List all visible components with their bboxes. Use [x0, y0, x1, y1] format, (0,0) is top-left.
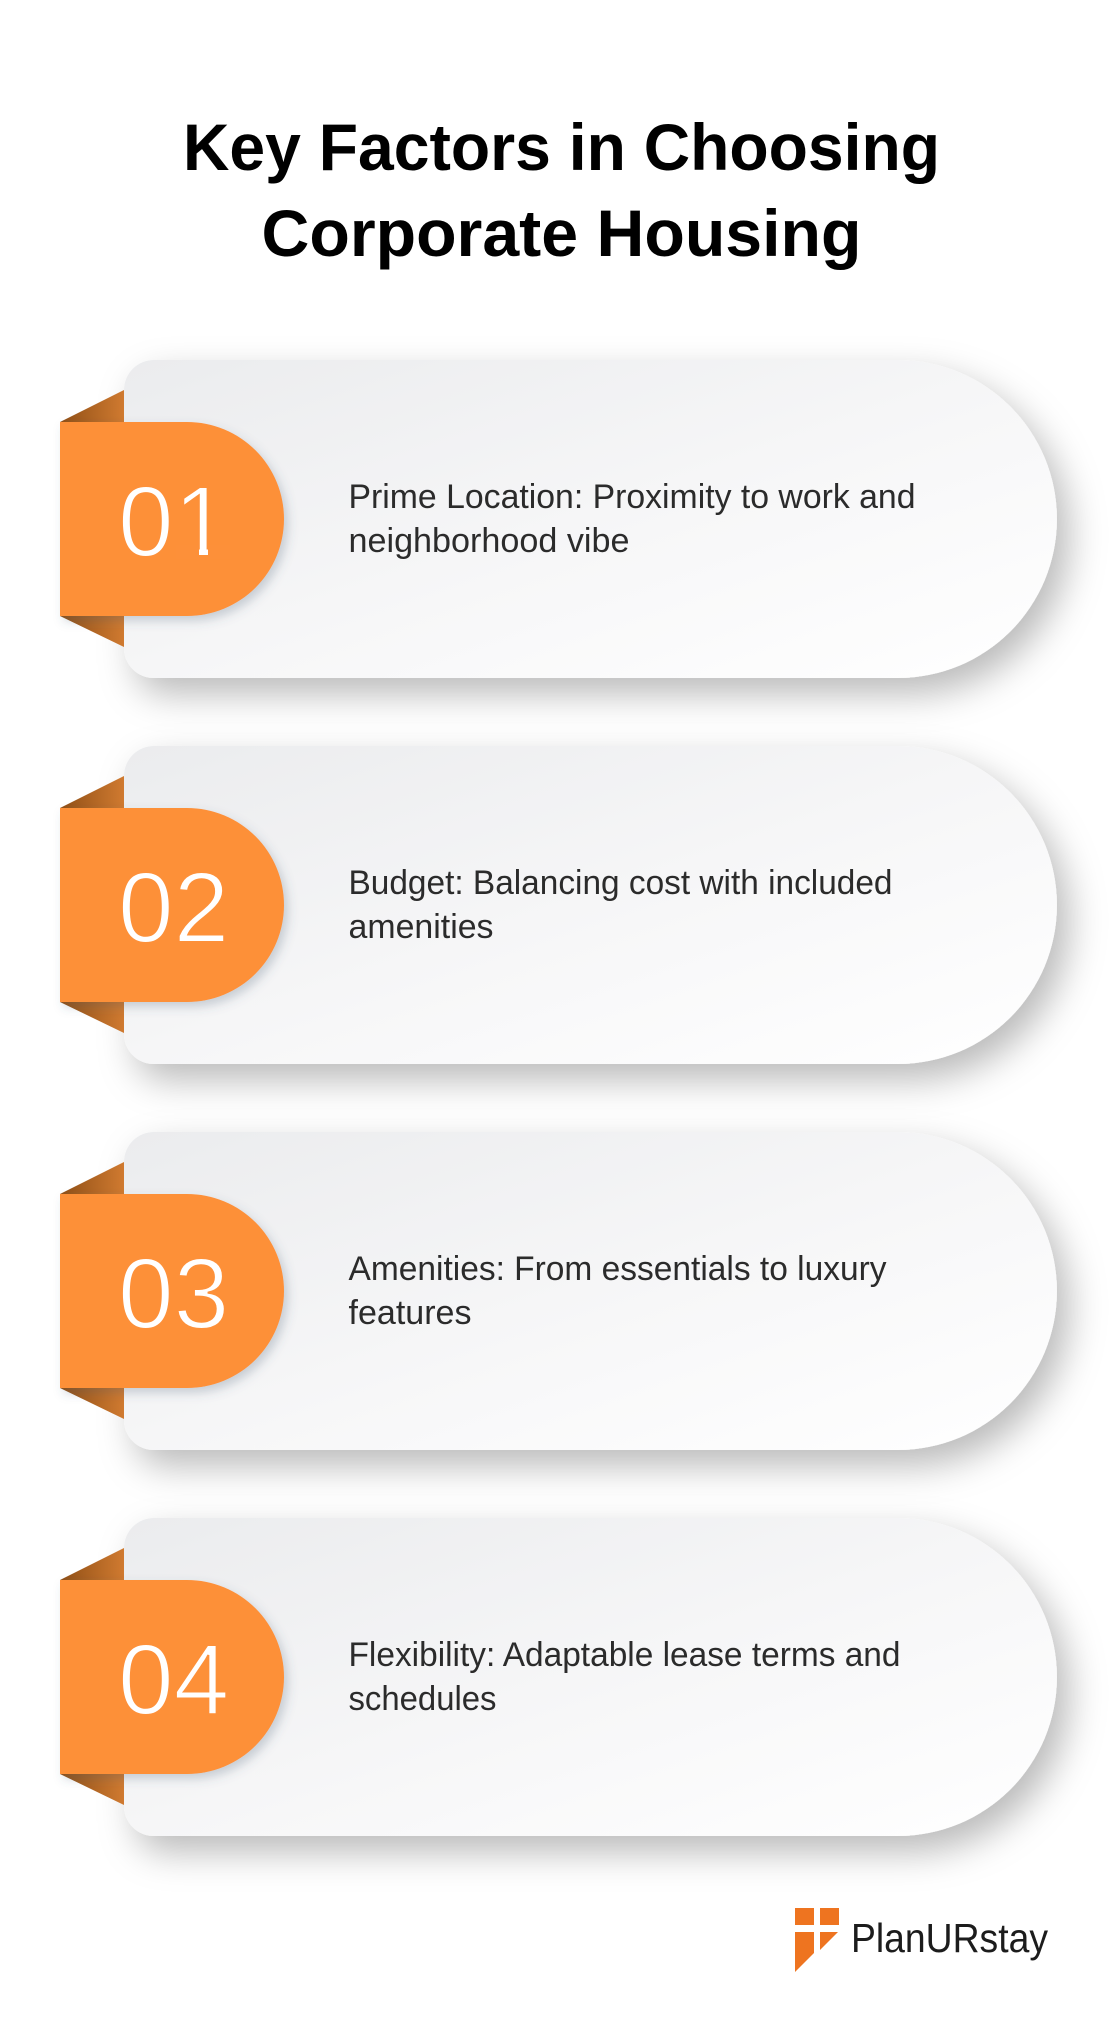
- ribbon fold top 02: [60, 776, 124, 808]
- number tab 01: [60, 422, 284, 616]
- text 03: Amenities: From essentials to luxury: [348, 1250, 886, 1288]
- number 02: 02: [118, 852, 229, 964]
- logo: PlanURstay: [795, 1908, 1048, 1972]
- card 03 background: [124, 1132, 1057, 1450]
- ribbon fold top 03: [60, 1162, 124, 1194]
- ribbon fold bottom 04: [60, 1774, 124, 1805]
- text 04: schedules: [348, 1680, 496, 1718]
- text 02: amenities: [348, 908, 494, 946]
- card 04 background: [124, 1518, 1057, 1836]
- number tab 02: [60, 808, 284, 1002]
- number 01: 01: [118, 466, 229, 578]
- text 02: Budget: Balancing cost with included: [348, 864, 892, 902]
- panel: factor 03: [60, 1132, 1057, 1450]
- text 04: Flexibility: Adaptable lease terms and: [348, 1636, 900, 1674]
- text 01: Prime Location: Proximity to work and: [348, 478, 916, 516]
- text 03: features: [348, 1294, 472, 1332]
- ribbon fold bottom 01: [60, 616, 124, 647]
- number tab 03: [60, 1194, 284, 1388]
- icon: logo mark: [795, 1908, 839, 1972]
- number 03: 03: [118, 1238, 229, 1350]
- number tab 04: [60, 1580, 284, 1774]
- ribbon fold bottom 02: [60, 1002, 124, 1033]
- title: [183, 110, 940, 270]
- title: Key Factors in Choosing: [183, 110, 940, 184]
- text 01: neighborhood vibe: [348, 522, 630, 560]
- ribbon fold top 01: [60, 390, 124, 422]
- ribbon fold bottom 03: [60, 1388, 124, 1419]
- card 01 background: [124, 360, 1057, 678]
- panel: factor 04: [60, 1518, 1057, 1836]
- panel: factor 01: [60, 360, 1057, 678]
- card 02 background: [124, 746, 1057, 1064]
- ribbon fold top 04: [60, 1548, 124, 1580]
- logo wordmark: PlanURstay: [851, 1915, 1048, 1961]
- panel: factor 02: [60, 746, 1057, 1064]
- number 04: 04: [118, 1624, 229, 1736]
- title: Corporate Housing: [262, 196, 862, 270]
